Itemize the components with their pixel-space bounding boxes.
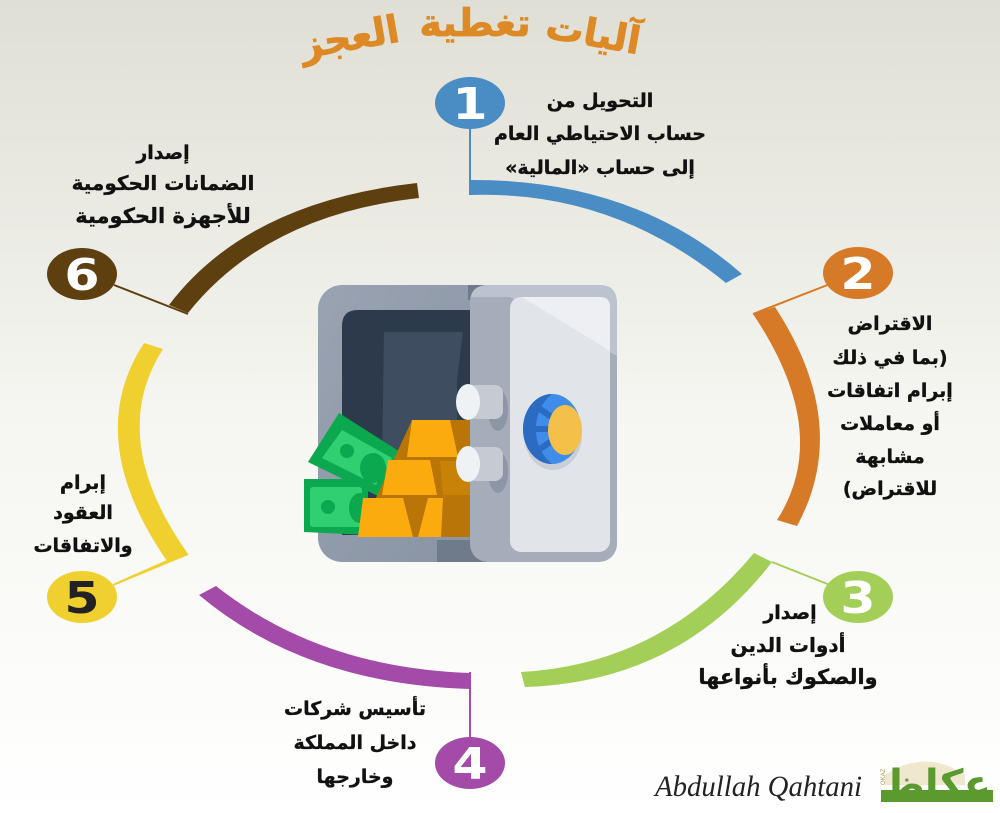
arc 3 — [521, 553, 772, 687]
arc 4 — [199, 586, 470, 689]
badge 1: 1 — [452, 79, 488, 130]
badge 6 — [47, 248, 117, 301]
text 4: وخارجها — [317, 766, 393, 788]
text 2: للاقتراض) — [843, 478, 937, 500]
text 2: (بما في ذلك — [832, 347, 948, 369]
badge 3 — [823, 571, 893, 624]
text 5: العقود — [53, 502, 113, 524]
step 5: yellow — [33, 343, 188, 624]
badge 4: 4 — [452, 739, 488, 790]
text 5: إبرام — [60, 472, 106, 494]
connector 3 — [772, 562, 830, 585]
text 5: والاتفاقات — [33, 535, 133, 557]
door panel — [510, 297, 610, 552]
text 1: التحويل من — [547, 90, 653, 112]
connector 5 — [113, 554, 188, 585]
logo: Okaz: OKAZ — [881, 768, 887, 785]
step 6: brown — [47, 142, 419, 314]
text 4 — [284, 696, 426, 788]
text 2: إبرام اتفاقات — [827, 380, 953, 402]
text 3: أدوات الدين — [731, 631, 845, 657]
dial — [523, 394, 582, 470]
text 2: الاقتراض — [848, 313, 932, 335]
text 1: حساب الاحتياطي العام — [494, 123, 706, 145]
arc 6 — [169, 183, 419, 313]
text 3: إصدار — [762, 602, 817, 624]
title: تغطية — [419, 1, 531, 45]
connector 2 — [753, 284, 830, 314]
arc 2 — [753, 307, 820, 526]
badge 2 — [823, 247, 893, 300]
text 4: تأسيس شركات — [284, 696, 426, 720]
money — [304, 413, 405, 535]
safe body — [318, 285, 490, 562]
text 3 — [698, 602, 878, 689]
text 6: إصدار — [135, 142, 190, 164]
logo: Okaz: عكاظ — [883, 762, 991, 808]
text 1: إلى حساب «المالية» — [505, 157, 695, 179]
step 3: green — [521, 553, 893, 689]
icon: safe with money and gold — [304, 285, 617, 562]
text 4: داخل المملكة — [294, 732, 417, 754]
text 5 — [33, 472, 133, 557]
text 2: أو معاملات — [840, 411, 940, 435]
step 2: orange — [753, 247, 953, 526]
arc 1 — [470, 180, 742, 283]
gold bars — [358, 420, 470, 537]
safe door — [470, 285, 617, 562]
text 6: للأجهزة الحكومية — [75, 202, 251, 228]
connector 6 — [114, 285, 188, 314]
text 1 — [494, 90, 706, 179]
badge 5: 5 — [64, 573, 100, 624]
badge 4 — [435, 737, 505, 790]
badge 1 — [435, 77, 505, 130]
hinges — [456, 384, 508, 493]
text 2: مشابهة — [855, 446, 925, 468]
connector 1 — [469, 120, 471, 195]
title — [295, 1, 645, 68]
safe interior — [342, 310, 472, 535]
step 4: purple — [199, 586, 505, 790]
text 3: والصكوك بأنواعها — [698, 662, 878, 689]
step 1: blue — [435, 77, 742, 283]
badge 5 — [47, 571, 117, 624]
arc 5 — [118, 343, 188, 561]
title: آليات — [543, 1, 645, 63]
title: العجز — [295, 7, 403, 68]
text 6: الضمانات الحكومية — [72, 171, 254, 195]
text 2 — [827, 313, 953, 500]
text 6 — [72, 142, 254, 228]
connector 4 — [469, 672, 471, 745]
signature: Abdullah Qahtani — [653, 770, 862, 803]
badge 6: 6 — [64, 250, 100, 301]
badge 3: 3 — [840, 573, 876, 624]
badge 2: 2 — [840, 249, 876, 300]
